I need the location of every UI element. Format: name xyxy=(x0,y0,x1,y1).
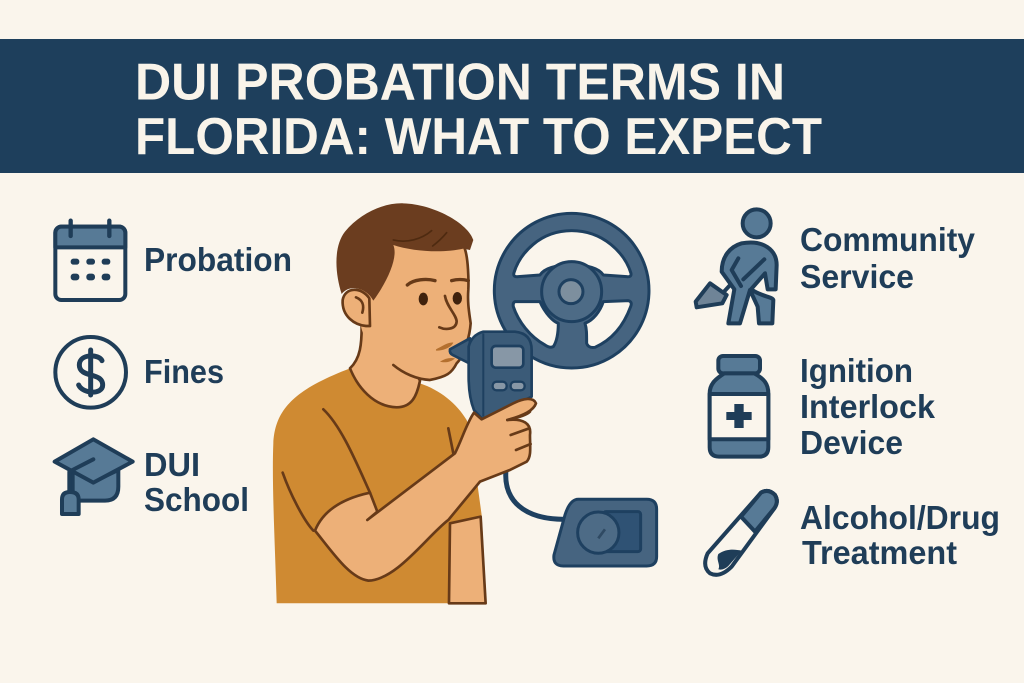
illustration: arm and hand xyxy=(315,399,536,581)
illustration: breathalyzer xyxy=(450,332,532,420)
header banner xyxy=(0,39,1024,173)
title xyxy=(135,54,822,166)
icon: calendar xyxy=(55,221,125,300)
shirt xyxy=(273,368,487,603)
label: DUI School: School xyxy=(144,481,249,518)
illustration: man xyxy=(273,203,487,603)
label: Ignition Interlock Device xyxy=(800,352,936,461)
icon: medicine bottle xyxy=(710,356,768,457)
neck xyxy=(350,327,420,407)
label: Community Service: Community xyxy=(800,221,976,258)
label: Probation: Probation xyxy=(144,241,292,278)
title: DUI PROBATION TERMS IN xyxy=(135,54,785,112)
face xyxy=(358,240,470,380)
illustration: steering wheel xyxy=(494,213,649,368)
label: Community Service xyxy=(800,221,976,295)
icon: dollar coin xyxy=(55,337,126,408)
brows, eyes, nose, mouth xyxy=(407,279,468,285)
label: Alcohol/Drug Treatment: Treatment xyxy=(802,534,957,571)
label: Alcohol/Drug Treatment xyxy=(800,499,1000,571)
label: DUI School xyxy=(144,446,249,518)
label: Ignition Interlock Device: Ignition xyxy=(800,352,913,389)
label: Community Service: Service xyxy=(800,258,914,295)
label: Fines: Fines xyxy=(144,353,224,390)
label: DUI School: DUI xyxy=(144,446,200,483)
icon: graduation cap xyxy=(55,439,133,514)
label: Alcohol/Drug Treatment: Alcohol/Drug xyxy=(800,499,1000,536)
icon: community service worker xyxy=(696,209,777,323)
title: FLORIDA: WHAT TO EXPECT xyxy=(135,108,822,166)
lower skin panel xyxy=(449,517,486,603)
label: Ignition Interlock Device: Device xyxy=(800,424,903,461)
label: Ignition Interlock Device: Interlock xyxy=(800,388,936,425)
hair xyxy=(336,203,473,301)
icon: test tube xyxy=(705,491,777,575)
ear xyxy=(343,290,370,326)
illustration: cable and interlock base unit xyxy=(506,470,657,566)
